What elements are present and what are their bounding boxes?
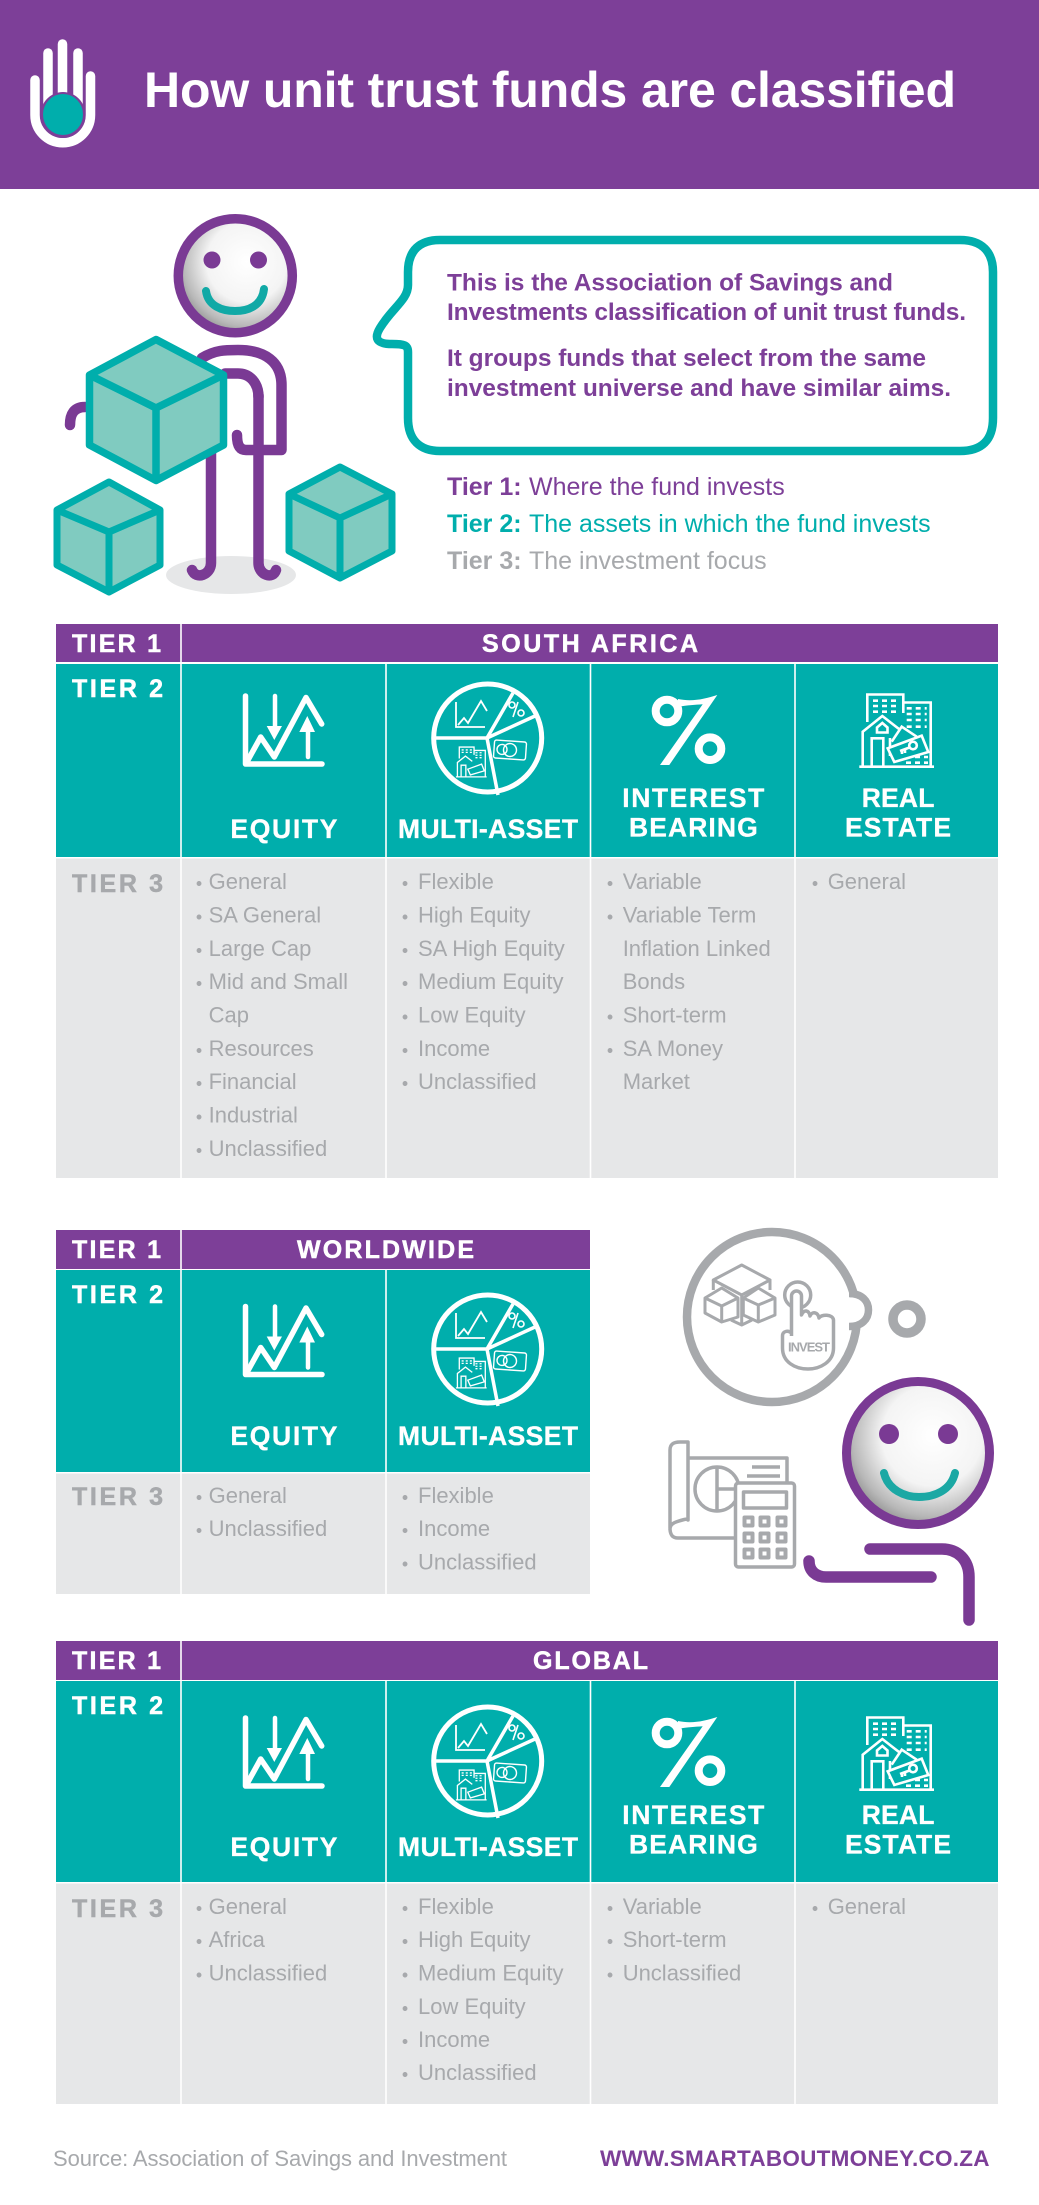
list: real estate focus: • (812, 1899, 818, 1919)
tier 2 label: TIER 2 (72, 675, 163, 703)
icon: equity (246, 696, 322, 764)
list: interest bearing focus: • (607, 1041, 613, 1061)
tier legend: Tier 3: (447, 547, 522, 575)
tier legend (447, 473, 931, 575)
list: multi-asset focus: High Equity (418, 1927, 531, 1952)
list: multi-asset focus (402, 869, 565, 1094)
list: multi-asset focus: Income (418, 1516, 490, 1541)
list: equity focus: • (196, 974, 202, 994)
label: multi-asset: MULTI-ASSET (398, 1421, 578, 1451)
character head (846, 1382, 990, 1524)
icon: plan with calculator (670, 1442, 794, 1567)
list: interest bearing focus (607, 869, 771, 1094)
list: multi-asset focus: • (402, 874, 408, 894)
list: equity focus: Financial (209, 1069, 297, 1094)
table: global (56, 1641, 998, 2104)
label: real estate: REAL (862, 1800, 934, 1830)
list: equity focus: Cap (209, 1002, 249, 1028)
bubble text: investment universe and have similar aims. (447, 375, 951, 402)
list: multi-asset focus: Income (418, 1036, 490, 1061)
icon: cubes (705, 1265, 775, 1325)
list: equity focus: Africa (209, 1927, 266, 1952)
list: equity focus: Unclassified (209, 1136, 327, 1161)
bubble text: Investments classification of unit trust funds. (447, 299, 966, 326)
icon: multi-asset pie (433, 1295, 542, 1406)
list: multi-asset focus: • (402, 1999, 408, 2019)
tier 2 label: TIER 2 (72, 1281, 163, 1309)
list: equity focus: • (196, 1041, 202, 1061)
list: multi-asset focus: • (402, 1041, 408, 1061)
list: multi-asset focus: • (402, 974, 408, 994)
list: multi-asset focus (402, 1894, 564, 2085)
list: interest bearing focus: Inflation Linked (623, 936, 771, 961)
website link: WWW.SMARTABOUTMONEY.CO.ZA (600, 2146, 990, 2171)
list: multi-asset focus: • (402, 1554, 408, 1574)
tier 3 label: TIER 3 (72, 1483, 163, 1511)
label: real estate (845, 1800, 951, 1860)
list: multi-asset focus: SA High Equity (418, 936, 565, 961)
icon: percent (656, 695, 721, 765)
list: equity focus: Mid and Small (209, 969, 348, 994)
list: multi-asset focus: • (402, 1965, 408, 1985)
list: interest bearing focus: Variable (623, 869, 702, 894)
label: real estate: ESTATE (845, 1830, 951, 1860)
list: interest bearing focus: Variable (623, 1894, 702, 1919)
list: equity focus: • (196, 941, 202, 961)
list: equity focus: • (196, 874, 202, 894)
tier legend: The assets in which the fund invests (529, 510, 931, 538)
label: interest bearing: INTEREST (622, 783, 764, 813)
list: equity focus: Industrial (209, 1102, 298, 1128)
list: multi-asset focus: Flexible (418, 1894, 494, 1919)
icon: percent (656, 1717, 721, 1787)
icon: invest hand (782, 1282, 834, 1369)
list: equity focus: • (196, 1488, 202, 1508)
list: interest bearing focus: Variable Term (623, 902, 756, 928)
list: equity focus (196, 1483, 327, 1541)
title: How unit trust funds are classified (144, 62, 956, 118)
list: equity focus: General (209, 1483, 287, 1508)
region heading: SOUTH AFRICA (482, 630, 698, 658)
label: multi-asset: MULTI-ASSET (398, 814, 578, 844)
list: multi-asset focus: • (402, 2032, 408, 2052)
list: interest bearing focus: Unclassified (623, 1960, 741, 1986)
list: equity focus: • (196, 1141, 202, 1161)
list: equity focus: • (196, 1965, 202, 1985)
source note: Source: Association of Savings and Investment (53, 2146, 507, 2171)
list: multi-asset focus: • (402, 1488, 408, 1508)
label: interest bearing (622, 783, 764, 842)
list: interest bearing focus: • (607, 874, 613, 894)
list: interest bearing focus: Short-term (623, 1002, 727, 1028)
table: worldwide (56, 1230, 590, 1594)
icon: invest hand: INVEST (788, 1340, 830, 1354)
icon: equity (246, 1718, 322, 1786)
label: interest bearing: BEARING (629, 812, 758, 842)
bubble text: This is the Association of Savings and (447, 270, 893, 296)
list: multi-asset focus: • (402, 1007, 408, 1027)
character body (70, 350, 282, 575)
list: multi-asset focus: Unclassified (418, 2060, 537, 2085)
list: interest bearing focus: SA Money (623, 1036, 723, 1061)
bubble text: It groups funds that select from the same (447, 345, 926, 372)
list: equity focus: General (209, 869, 287, 894)
label: equity: EQUITY (230, 1832, 338, 1862)
tier legend: Tier 1: (447, 473, 522, 501)
label: interest bearing: INTEREST (622, 1800, 764, 1830)
character head (178, 219, 292, 333)
list: equity focus: Large Cap (209, 936, 311, 961)
list: multi-asset focus: • (402, 1899, 408, 1919)
character thinking (809, 1382, 990, 1620)
list: equity focus (196, 869, 348, 1161)
list: equity focus: • (196, 1074, 202, 1094)
list: equity focus: Unclassified (209, 1960, 327, 1986)
thought bubble (687, 1232, 921, 1402)
character shadow (166, 556, 296, 594)
list: interest bearing focus: Bonds (623, 969, 685, 994)
label: interest bearing: BEARING (629, 1830, 758, 1860)
list: equity focus: • (196, 907, 202, 927)
header banner (0, 0, 1039, 189)
list: real estate focus: General (828, 1894, 906, 1919)
table: south africa (56, 624, 998, 1178)
label: real estate: ESTATE (845, 812, 951, 842)
label: equity: EQUITY (230, 1421, 338, 1451)
tier 1 label: TIER 1 (72, 1647, 161, 1675)
region heading: WORLDWIDE (297, 1236, 474, 1264)
list: equity focus: • (196, 1107, 202, 1127)
list: multi-asset focus (402, 1483, 537, 1574)
list: multi-asset focus: • (402, 1521, 408, 1541)
list: interest bearing focus: • (607, 1899, 613, 1919)
list: interest bearing focus: • (607, 1965, 613, 1985)
thought dot (893, 1305, 921, 1333)
list: interest bearing focus: • (607, 1007, 613, 1027)
label: real estate (845, 783, 951, 842)
speech bubble (377, 240, 993, 451)
list: multi-asset focus: • (402, 1074, 408, 1094)
list: multi-asset focus: • (402, 2065, 408, 2085)
character arms (809, 1549, 969, 1620)
icon: equity (246, 1306, 322, 1374)
list: multi-asset focus: Unclassified (418, 1069, 537, 1094)
tier legend: Tier 2: (447, 510, 522, 538)
list: multi-asset focus: Unclassified (418, 1550, 537, 1574)
list: interest bearing focus (607, 1894, 741, 1986)
list: interest bearing focus: • (607, 1932, 613, 1952)
big box (90, 340, 224, 480)
list: multi-asset focus: • (402, 941, 408, 961)
region heading: GLOBAL (533, 1647, 648, 1675)
icon: real estate (859, 1718, 934, 1790)
icon: hand logo (35, 44, 90, 143)
tier 3 label: TIER 3 (72, 870, 163, 898)
list: multi-asset focus: Low Equity (418, 1994, 526, 2019)
label: multi-asset: MULTI-ASSET (398, 1832, 578, 1862)
label: equity: EQUITY (230, 814, 338, 844)
list: equity focus: • (196, 1899, 202, 1919)
label: interest bearing (622, 1800, 764, 1860)
list: real estate focus: General (828, 869, 906, 894)
list: real estate focus: • (812, 874, 818, 894)
list: equity focus (196, 1894, 327, 1986)
label: real estate: REAL (862, 783, 934, 813)
icon: multi-asset pie (433, 1707, 542, 1818)
list: multi-asset focus: Low Equity (418, 1002, 526, 1028)
list: interest bearing focus: Short-term (623, 1927, 727, 1952)
small left box (57, 482, 160, 592)
list: equity focus: Resources (209, 1036, 314, 1061)
bubble text (447, 270, 966, 402)
tier 1 label: TIER 1 (72, 1236, 161, 1264)
list: multi-asset focus: • (402, 907, 408, 927)
list: multi-asset focus: • (402, 1932, 408, 1952)
list: multi-asset focus: Flexible (418, 869, 494, 894)
list: multi-asset focus: Medium Equity (418, 969, 564, 994)
list: equity focus: • (196, 1521, 202, 1541)
list: multi-asset focus: Income (418, 2027, 490, 2052)
list: interest bearing focus: • (607, 907, 613, 927)
icon: real estate (859, 694, 934, 767)
list: equity focus: SA General (209, 902, 321, 928)
list: multi-asset focus: High Equity (418, 902, 531, 928)
list: equity focus: Unclassified (209, 1516, 327, 1541)
tier 1 label: TIER 1 (72, 630, 161, 658)
list: multi-asset focus: Flexible (418, 1483, 494, 1508)
icon: multi-asset pie (433, 684, 542, 795)
tier 3 label: TIER 3 (72, 1895, 163, 1923)
character with boxes (57, 219, 392, 594)
small right box (289, 467, 392, 578)
list: multi-asset focus: Medium Equity (418, 1960, 564, 1986)
tier legend: The investment focus (529, 547, 767, 575)
tier legend: Where the fund invests (529, 473, 785, 501)
list: interest bearing focus: Market (623, 1069, 690, 1094)
list: equity focus: • (196, 1932, 202, 1952)
tier 2 label: TIER 2 (72, 1692, 163, 1720)
list: equity focus: General (209, 1894, 287, 1919)
